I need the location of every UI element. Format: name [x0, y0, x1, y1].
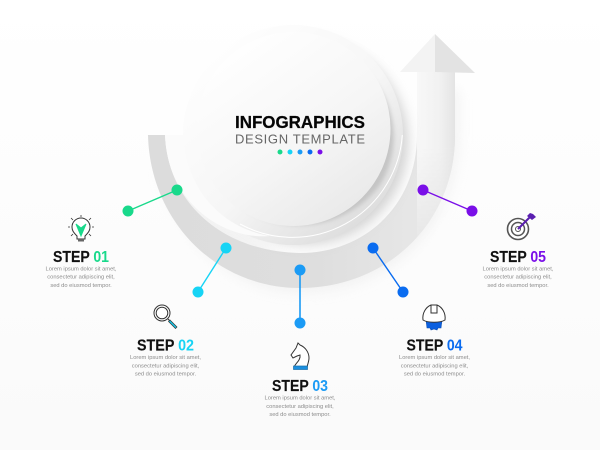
step 01 text: Lorem ipsum dolor sit amet,	[46, 266, 117, 272]
title line 2: DESIGN TEMPLATE	[235, 132, 365, 146]
step 01 text: sed do eiusmod tempor.	[50, 283, 112, 289]
step 02 text: sed do eiusmod tempor.	[135, 372, 197, 378]
step 05 text: sed do eiusmod tempor.	[487, 283, 549, 289]
step 03 text: consectetur adipiscing elit,	[266, 404, 334, 410]
title dots	[278, 150, 322, 154]
icon: helmet with gear	[423, 305, 445, 330]
disc shadow	[204, 40, 408, 244]
inner disc shadow	[240, 73, 394, 225]
panel: central disc	[165, 25, 408, 245]
step 03 text: sed do eiusmod tempor.	[269, 412, 331, 418]
step 02 text: STEP 02	[137, 338, 194, 354]
icon: target with dart	[508, 213, 536, 240]
white band covering outer disc left side	[165, 135, 270, 236]
step 01 text: STEP 01	[53, 249, 109, 266]
arrow head	[400, 34, 475, 73]
icon: light bulb	[68, 215, 94, 242]
panel: curved arrow	[148, 34, 475, 292]
inner disc	[196, 32, 390, 226]
step 05 text: consectetur adipiscing elit,	[484, 275, 552, 281]
title line 1: INFOGRAPHICS	[235, 112, 365, 132]
step 05 text: Lorem ipsum dolor sit amet,	[483, 266, 554, 272]
outer disc	[183, 25, 403, 245]
step 04 text: consectetur adipiscing elit,	[401, 363, 469, 369]
step 03 text	[265, 378, 336, 418]
step 05 text	[483, 249, 554, 289]
arrow shaft	[417, 72, 444, 202]
connector: step 04	[368, 242, 408, 298]
connector: step 02	[192, 242, 232, 298]
icon: magnifier	[154, 305, 177, 328]
step 02 text: consectetur adipiscing elit,	[132, 363, 200, 369]
step 01 text: consectetur adipiscing elit,	[47, 275, 115, 281]
step 04 text	[399, 338, 470, 378]
arrow curved band	[148, 72, 455, 288]
icon: chess knight	[291, 343, 309, 370]
step 04 text: sed do eiusmod tempor.	[404, 372, 466, 378]
step 02 text: Lorem ipsum dolor sit amet,	[130, 355, 201, 361]
title	[235, 112, 365, 154]
arrow band shadow	[160, 90, 459, 292]
step 03 text: STEP 03	[272, 378, 328, 395]
step 05 text: STEP 05	[490, 249, 546, 266]
connector: step 05	[418, 184, 478, 216]
step 03 text: Lorem ipsum dolor sit amet,	[265, 396, 336, 402]
step 02 text	[130, 338, 201, 378]
connector: step 01	[122, 184, 182, 216]
step 01 text	[46, 249, 117, 289]
step 04 text: Lorem ipsum dolor sit amet,	[399, 355, 470, 361]
connector: step 03	[294, 264, 306, 328]
step 04 text: STEP 04	[406, 338, 463, 354]
white rim of outer disc	[240, 135, 402, 237]
